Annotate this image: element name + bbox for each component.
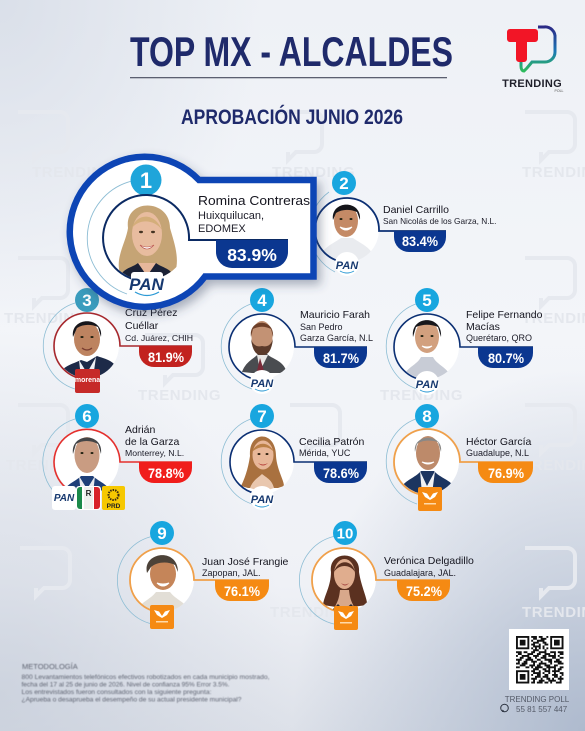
party ring	[54, 429, 192, 490]
candidate 5: Felipe Fernando Macías	[386, 288, 533, 395]
candidate 6: Adrián de la Garza	[43, 404, 192, 510]
number 3	[43, 288, 99, 389]
text: Adrián de la Garza: de la Garza	[125, 436, 179, 448]
approval badge: 83.9%	[227, 245, 277, 265]
candidate 3: Cruz Pérez Cuéllar	[43, 288, 192, 393]
party logo PRD	[102, 486, 125, 510]
approval badge	[216, 240, 288, 268]
subtitle: APROBACIÓN JUNIO 2026	[181, 105, 403, 129]
party ring	[103, 195, 288, 281]
logo: Trending Poll: POLL	[555, 89, 564, 93]
approval badge	[314, 462, 367, 483]
text: Verónica Delgadillo: Guadalajara, JAL.	[384, 568, 456, 578]
watermarks: TRENDING	[272, 164, 355, 181]
methodology text: Los entrevistados fueron consultados con la siguiente pregunta:	[22, 690, 212, 696]
photo	[317, 199, 378, 260]
party ring	[230, 430, 367, 494]
title: TOP MX - ALCALDES	[130, 28, 453, 75]
number 8: 8	[422, 407, 432, 426]
text: Mauricio Farah: Mauricio Farah	[300, 309, 370, 321]
candidate 10: Verónica Delgadillo	[299, 521, 450, 630]
party logo PRI: R	[86, 489, 92, 498]
text: Daniel Carrillo	[383, 204, 496, 226]
text: Verónica Delgadillo: Verónica Delgadillo	[384, 555, 474, 567]
photo	[230, 430, 294, 494]
text: Héctor García: Héctor García	[466, 436, 532, 448]
candidate 2: Daniel Carrillo	[309, 171, 446, 276]
methodology text	[22, 662, 270, 704]
text: Felipe Fernando Macías: Felipe Fernando	[466, 309, 543, 321]
candidate 7: Cecilia Patrón	[221, 404, 367, 510]
text: Cecilia Patrón: Cecilia Patrón	[299, 436, 365, 448]
party logo PAN: PAN	[336, 260, 359, 272]
candidate 8: Héctor García	[386, 404, 533, 511]
number 6: 6	[82, 407, 92, 426]
name and location	[198, 193, 311, 235]
photo	[395, 430, 459, 496]
watermarks: TRENDING	[270, 604, 353, 621]
party logo PAN	[250, 486, 274, 510]
number 6	[43, 404, 99, 495]
approval badge	[478, 347, 533, 368]
text: Cecilia Patrón: Mérida, YUC	[299, 448, 351, 458]
text: Felipe Fernando Macías: Querétaro, QRO	[466, 333, 532, 343]
methodology text: fecha del 17 al 25 de junio de 2026. Nivel de confianza 95% Error 3.5%.	[22, 682, 230, 688]
party logo MC	[418, 487, 442, 511]
watermarks: TRENDING	[6, 457, 89, 474]
logo: Trending Poll: TRENDING	[502, 78, 562, 90]
approval badge	[478, 462, 533, 483]
party logo PAN: PAN	[54, 493, 75, 504]
number 7	[221, 404, 274, 504]
number 9	[117, 521, 174, 624]
watermarks: TRENDING	[380, 387, 463, 404]
number 5: 5	[422, 291, 432, 310]
number 7: 7	[257, 407, 267, 426]
number 1: 1	[140, 168, 152, 193]
text: Juan José Frangie: Zapopan, JAL.	[202, 568, 261, 578]
number 1	[87, 164, 162, 294]
party ring	[54, 313, 192, 379]
icon: WhatsApp	[501, 704, 508, 712]
photo	[395, 315, 459, 381]
party logo PAN	[415, 371, 439, 395]
approval badge	[139, 346, 192, 367]
text: Cecilia Patrón	[299, 436, 365, 458]
name and location: Huixquilucan,	[198, 210, 264, 222]
methodology text: METODOLOGÍA	[22, 662, 78, 671]
photo	[118, 206, 177, 277]
text: Adrián de la Garza	[125, 424, 184, 458]
party logo PAN: PAN	[129, 275, 165, 294]
candidate 9: Juan José Frangie	[117, 521, 269, 629]
number 8	[386, 404, 439, 504]
watermarks	[4, 112, 585, 621]
party logo PAN: PAN	[251, 378, 274, 390]
approval badge: 75.2%	[406, 584, 442, 599]
party ring	[130, 548, 269, 612]
party ring	[315, 198, 446, 262]
number 10	[299, 521, 357, 624]
methodology text: 800 Levantamientos telefónicos efectivos robotizados en cada municipio mostrado,	[22, 675, 270, 681]
party logo PAN	[52, 486, 76, 510]
photo	[130, 548, 194, 612]
text: Daniel Carrillo: San Nicolás de los Garza, N.L.	[383, 216, 496, 226]
number 4	[221, 288, 274, 389]
approval badge	[215, 580, 269, 601]
party ring	[312, 548, 450, 612]
QR code	[509, 629, 569, 690]
text: Cruz Pérez Cuéllar: Cruz Pérez	[125, 307, 178, 319]
watermarks: TRENDING	[4, 310, 87, 327]
text: Cruz Pérez Cuéllar: Cd. Juárez, CHIH	[125, 333, 193, 343]
approval badge: 81.7%	[323, 351, 359, 366]
party logo PRI	[76, 486, 101, 510]
approval badge: 81.9%	[148, 350, 184, 365]
number 3: 3	[82, 291, 92, 310]
photo	[55, 314, 121, 380]
photo	[55, 430, 119, 494]
number 9: 9	[157, 524, 167, 543]
name and location: EDOMEX	[198, 223, 246, 235]
contact: Trending Poll: 55 81 557 447	[516, 705, 568, 714]
text: Cruz Pérez Cuéllar	[125, 307, 193, 343]
party logo MC	[150, 605, 174, 629]
party logo morena: morena	[75, 377, 100, 384]
approval badge: 78.8%	[148, 466, 184, 481]
party ring	[394, 314, 533, 380]
approval badge	[397, 580, 450, 601]
contact: Trending Poll: TRENDING POLL	[505, 695, 570, 704]
number 4: 4	[257, 291, 267, 310]
approval badge: 76.9%	[488, 466, 524, 481]
approval badge: 80.7%	[488, 351, 524, 366]
text: Cruz Pérez Cuéllar: Cuéllar	[125, 320, 159, 332]
approval badge: 78.6%	[323, 466, 359, 481]
callout frame	[70, 157, 314, 307]
photo	[312, 548, 376, 612]
party logo PAN: PAN	[251, 494, 274, 506]
party logo MC	[334, 606, 358, 630]
party logo PRD: PRD	[107, 503, 121, 510]
text: Daniel Carrillo: Daniel Carrillo	[383, 204, 449, 216]
approval badge	[139, 462, 192, 483]
logo: Trending Poll	[502, 27, 564, 93]
text: Verónica Delgadillo	[384, 555, 474, 578]
party logo morena	[75, 369, 100, 393]
text: Juan José Frangie: Juan José Frangie	[202, 556, 289, 568]
party logo PAN	[129, 272, 165, 299]
party ring	[229, 314, 367, 380]
number 2: 2	[339, 174, 349, 193]
text: Mauricio Farah	[300, 309, 373, 343]
name and location: Romina Contreras	[198, 193, 311, 208]
approval badge: 76.1%	[224, 584, 260, 599]
contact: Trending Poll	[501, 695, 570, 714]
party logo PAN	[250, 370, 274, 394]
text: Héctor García: Guadalupe, N.L	[466, 448, 529, 458]
text: Héctor García	[466, 436, 532, 458]
candidate 4: Mauricio Farah	[221, 288, 367, 394]
approval badge: 83.4%	[402, 234, 438, 249]
methodology text: ¿Aprueba o desaprueba el desempeño de su actual presidente municipal?	[22, 698, 242, 704]
number 5	[386, 288, 439, 389]
text: Mauricio Farah: San Pedro	[300, 322, 343, 332]
watermarks: TRENDING	[32, 164, 115, 181]
watermarks: TRENDING	[138, 387, 221, 404]
number 10: 10	[337, 526, 353, 542]
text: Juan José Frangie	[202, 556, 289, 578]
party logo PAN: PAN	[416, 379, 439, 391]
text: Adrián de la Garza: Monterrey, N.L.	[125, 448, 184, 458]
text: Adrián de la Garza: Adrián	[125, 424, 156, 436]
text: Felipe Fernando Macías	[466, 309, 543, 343]
photo	[230, 315, 294, 379]
approval badge	[314, 347, 367, 368]
text: Mauricio Farah: Garza García, N.L	[300, 333, 373, 343]
party ring	[394, 429, 533, 495]
text: Felipe Fernando Macías: Macías	[466, 321, 500, 333]
featured callout: candidate 1 Romina Contreras	[70, 157, 314, 307]
